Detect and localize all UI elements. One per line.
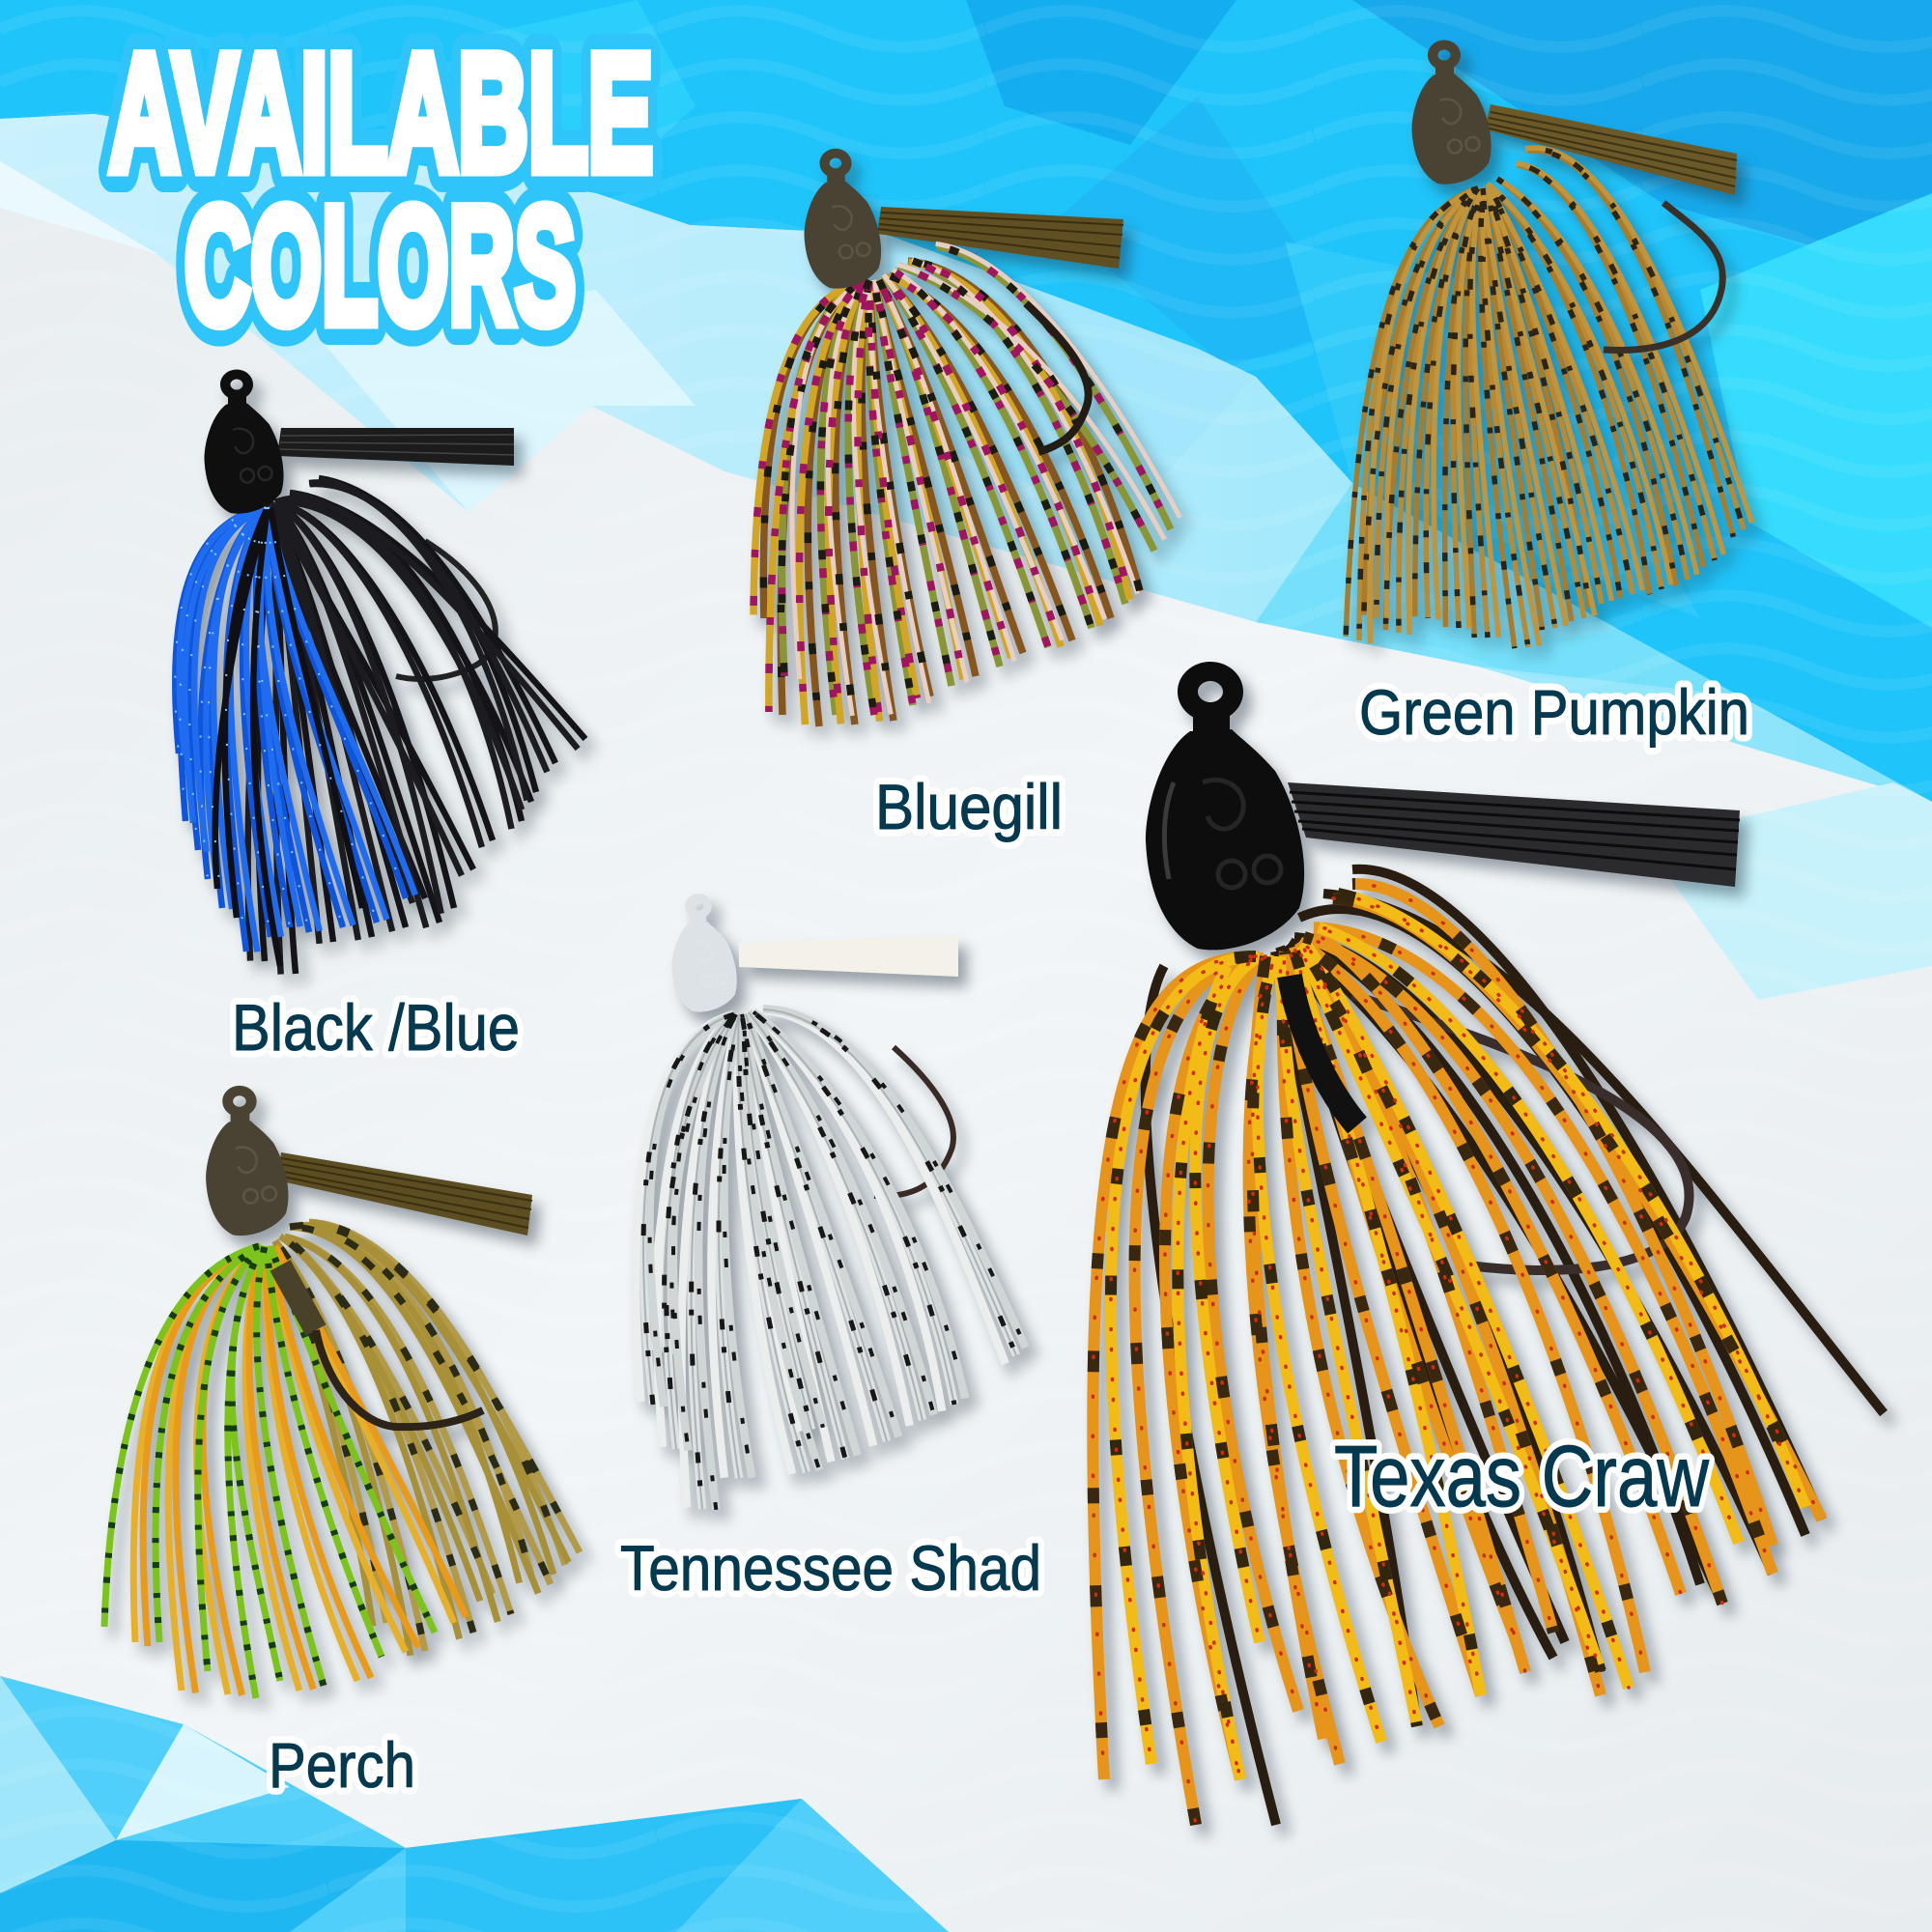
skirt [104, 1222, 580, 1698]
skirt [750, 235, 1187, 735]
title: COLORS [185, 173, 576, 358]
weed guard [277, 1152, 532, 1236]
label: texas craw: Texas Craw [1334, 1429, 1710, 1525]
head glints [1164, 782, 1174, 879]
head [672, 894, 737, 1012]
skirt front [1093, 884, 1822, 1825]
head [805, 149, 881, 289]
label: tennessee shad: Tennessee Shad [620, 1532, 1041, 1604]
head [206, 1086, 288, 1236]
lure: texas craw [1093, 662, 1884, 1825]
lure: tennessee shad [628, 894, 1030, 1518]
hook [280, 1265, 316, 1330]
lure: bluegill [750, 149, 1187, 735]
label: bluegill: Bluegill [875, 771, 1063, 842]
label: perch: Perch [269, 1729, 415, 1801]
weed guard [1485, 104, 1737, 195]
hook [396, 541, 496, 679]
hook [874, 1047, 953, 1196]
label: black and blue: Black /Blue [232, 991, 520, 1065]
lure: perch [104, 1086, 580, 1698]
title: COLORS [185, 173, 576, 358]
skirt back [1146, 869, 1884, 1825]
hook shank [1290, 976, 1357, 1125]
head [205, 369, 284, 514]
title [109, 20, 653, 358]
weed guard [739, 936, 958, 977]
hook [1352, 995, 1690, 1270]
label: tennessee shad: Tennessee Shad [620, 1532, 1041, 1604]
head [1412, 41, 1492, 185]
weed guard [1288, 782, 1740, 887]
title: AVAILABLE [109, 20, 653, 206]
label: bluegill: Bluegill [875, 771, 1063, 842]
label: green pumpkin: Green Pumpkin [1359, 676, 1749, 748]
weed guard [877, 207, 1123, 269]
skirt [1346, 143, 1755, 655]
skirt [175, 478, 586, 983]
label: green pumpkin: Green Pumpkin [1359, 676, 1749, 748]
label: perch: Perch [269, 1729, 415, 1801]
lure: black and blue [175, 369, 586, 983]
lure: green pumpkin [1346, 41, 1755, 655]
label: texas craw: Texas Craw [1334, 1429, 1710, 1525]
head [1146, 662, 1304, 950]
label: black and blue: Black /Blue [232, 991, 520, 1065]
weed guard [277, 428, 514, 466]
hook [1026, 303, 1089, 452]
hook [1604, 203, 1722, 350]
skirt [628, 1002, 1030, 1518]
title: AVAILABLE [109, 20, 653, 206]
